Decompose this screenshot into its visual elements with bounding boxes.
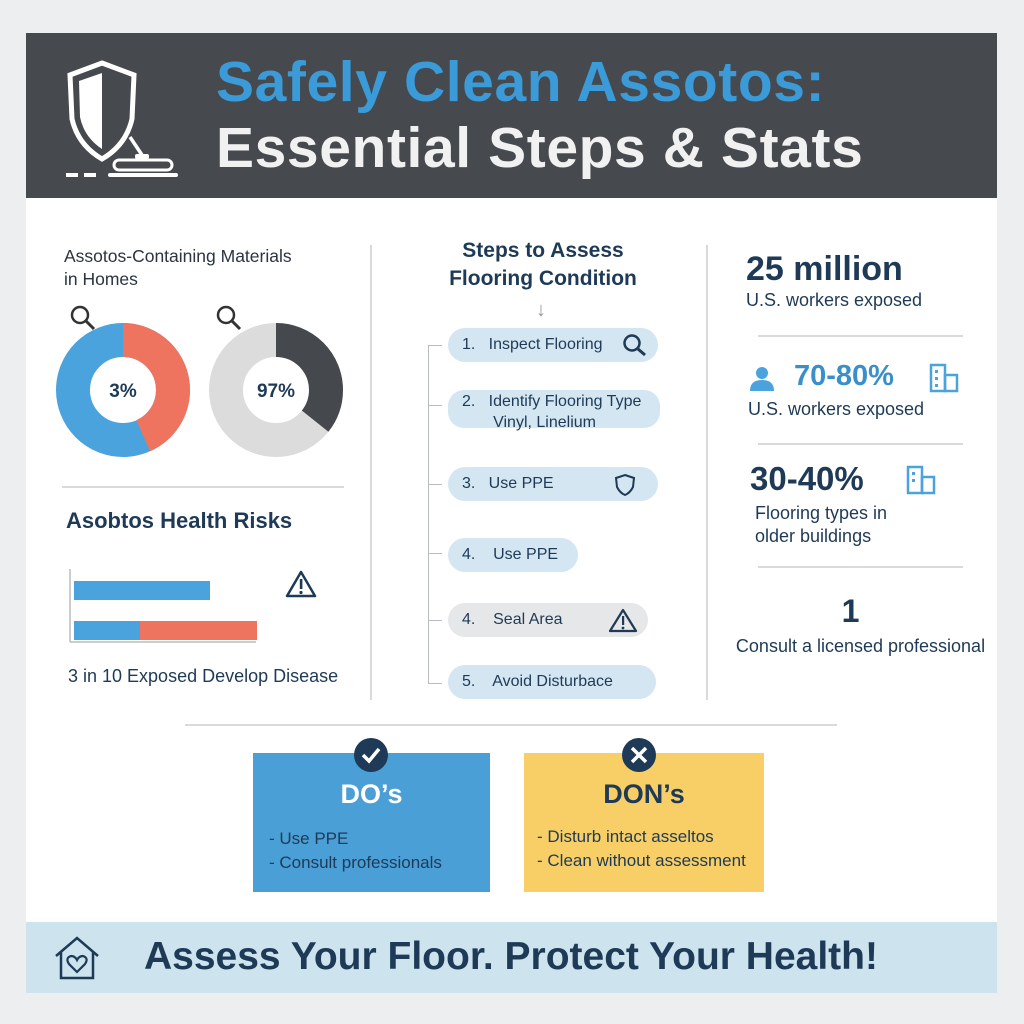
panel: DON'Ts: - Clean without assessment bbox=[537, 851, 746, 870]
icon: cross bbox=[622, 738, 656, 772]
stat 4: 1 bbox=[842, 593, 859, 629]
step 2: Vinyl, Linelium bbox=[493, 414, 596, 431]
donut chart 3%: 97% bbox=[257, 381, 295, 402]
step 6 bbox=[448, 665, 656, 699]
panel: stats: 70-80% bbox=[794, 360, 894, 392]
panel: DOs: DO’s bbox=[340, 779, 402, 809]
stat 4 bbox=[736, 593, 985, 656]
step 4: 4. Use PPE bbox=[462, 546, 558, 563]
panel: DOs: - Consult professionals bbox=[269, 853, 442, 872]
step 3: 3. Use PPE bbox=[462, 475, 554, 492]
stat 1: U.S. workers exposed bbox=[746, 290, 922, 310]
icon: shield and floor scrubber bbox=[66, 60, 178, 177]
step 3 bbox=[448, 467, 658, 501]
stat 1: 25 million bbox=[746, 250, 903, 288]
panel: DOs bbox=[253, 753, 490, 892]
stat 2 bbox=[748, 360, 958, 419]
panel: steps bbox=[449, 239, 637, 321]
heading: materials bbox=[64, 246, 292, 289]
heading: steps bbox=[449, 239, 637, 290]
icon: check bbox=[354, 738, 388, 772]
panel: DON'Ts bbox=[524, 753, 764, 892]
caption: bar chart: 3 in 10 Exposed Develop Disease bbox=[68, 666, 338, 686]
stat 3: Flooring types in bbox=[755, 503, 887, 523]
step 5 bbox=[448, 603, 648, 637]
step 4 bbox=[448, 538, 578, 572]
step 5: 4. Seal Area bbox=[462, 611, 563, 628]
panel: DOs: - Use PPE bbox=[269, 829, 348, 848]
step 2: 2. Identify Flooring Type bbox=[462, 393, 641, 410]
panel: DON'Ts: DON’s bbox=[603, 779, 685, 809]
step 2 bbox=[448, 390, 660, 428]
donut chart 3%: 3% bbox=[109, 381, 137, 402]
title bbox=[216, 50, 863, 180]
icon: house heart bbox=[55, 936, 99, 980]
stat 1 bbox=[746, 250, 922, 310]
step 1 bbox=[448, 328, 658, 362]
heading: steps: Steps to Assess bbox=[462, 239, 624, 262]
stat 3: older buildings bbox=[755, 526, 871, 546]
footer text: Assess Your Floor. Protect Your Health! bbox=[144, 935, 878, 978]
header banner bbox=[26, 33, 997, 198]
panel: stats bbox=[736, 250, 985, 656]
bar chart bbox=[69, 569, 257, 643]
footer banner bbox=[26, 922, 997, 993]
panel: left materials bbox=[56, 246, 343, 457]
icon: warning bbox=[286, 570, 316, 598]
heading: materials: in Homes bbox=[64, 269, 138, 289]
heading: steps: Flooring Condition bbox=[449, 267, 637, 290]
panel: stats: U.S. workers exposed bbox=[748, 399, 924, 419]
title: Essential Steps & Stats bbox=[216, 116, 863, 180]
heading: health risks: Asobtos Health Risks bbox=[66, 508, 292, 533]
heading: materials: Assotos-Containing Materials bbox=[64, 246, 292, 266]
title: Safely Clean Assotos: bbox=[216, 50, 825, 114]
step 6: 5. Avoid Disturbace bbox=[462, 673, 613, 690]
panel: DON'Ts: - Disturb intact asseltos bbox=[537, 827, 714, 846]
donut chart 3% bbox=[56, 306, 343, 457]
step 1: 1. Inspect Flooring bbox=[462, 336, 603, 353]
arrow down: ↓ bbox=[536, 299, 546, 321]
stat 3 bbox=[750, 460, 936, 546]
stat 4: Consult a licensed professional bbox=[736, 636, 985, 656]
stat 3: 30-40% bbox=[750, 460, 864, 497]
